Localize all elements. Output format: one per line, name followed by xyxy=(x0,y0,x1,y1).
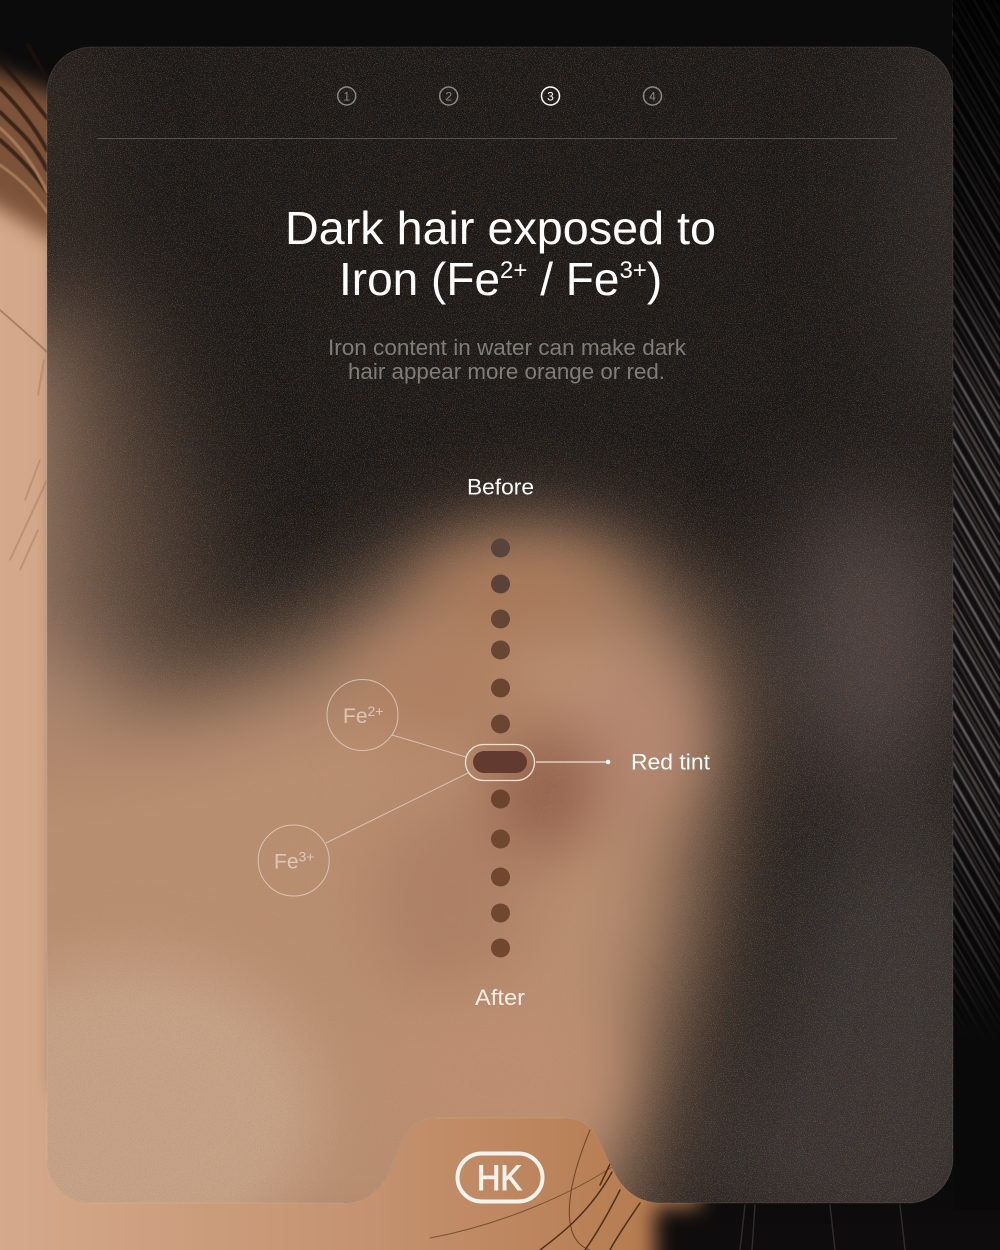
dot timeline xyxy=(491,538,510,958)
step indicator: 4 xyxy=(649,89,656,103)
HK logo: HK xyxy=(477,1159,522,1198)
step indicator xyxy=(338,87,662,105)
label: before: Before xyxy=(467,474,534,500)
connector lines to ions xyxy=(326,735,468,843)
ion Fe3+ xyxy=(258,825,329,896)
step indicator: 2 xyxy=(445,89,452,103)
step 3, active xyxy=(542,87,560,105)
right hair strands xyxy=(953,0,1000,1040)
subtitle: Iron content in water can make dark xyxy=(328,335,687,360)
step 1 xyxy=(338,87,356,105)
title: / Fe xyxy=(527,253,619,305)
title: 3+ xyxy=(619,257,647,284)
title xyxy=(285,202,716,305)
label: after: After xyxy=(475,985,525,1010)
label: red tint: Red tint xyxy=(631,750,710,774)
ion Fe2+: Fe xyxy=(343,705,368,728)
highlighted red tint pill xyxy=(466,744,534,780)
title: Iron (Fe xyxy=(339,253,500,305)
ion Fe3+: Fe xyxy=(274,850,299,874)
step indicator: 3 xyxy=(547,89,554,103)
title: ) xyxy=(647,253,662,305)
ion Fe2+ xyxy=(327,680,398,750)
ion Fe2+: 2+ xyxy=(368,703,383,719)
step 2 xyxy=(440,87,458,105)
HK logo xyxy=(458,1154,542,1202)
red tint leader xyxy=(536,760,610,764)
title: 2+ xyxy=(500,257,527,284)
title: Dark hair exposed to xyxy=(285,202,716,254)
step indicator: 1 xyxy=(343,89,350,103)
subtitle xyxy=(328,335,687,384)
ion Fe3+: 3+ xyxy=(299,848,314,864)
step 4 xyxy=(644,87,662,105)
subtitle: hair appear more orange or red. xyxy=(348,359,665,384)
